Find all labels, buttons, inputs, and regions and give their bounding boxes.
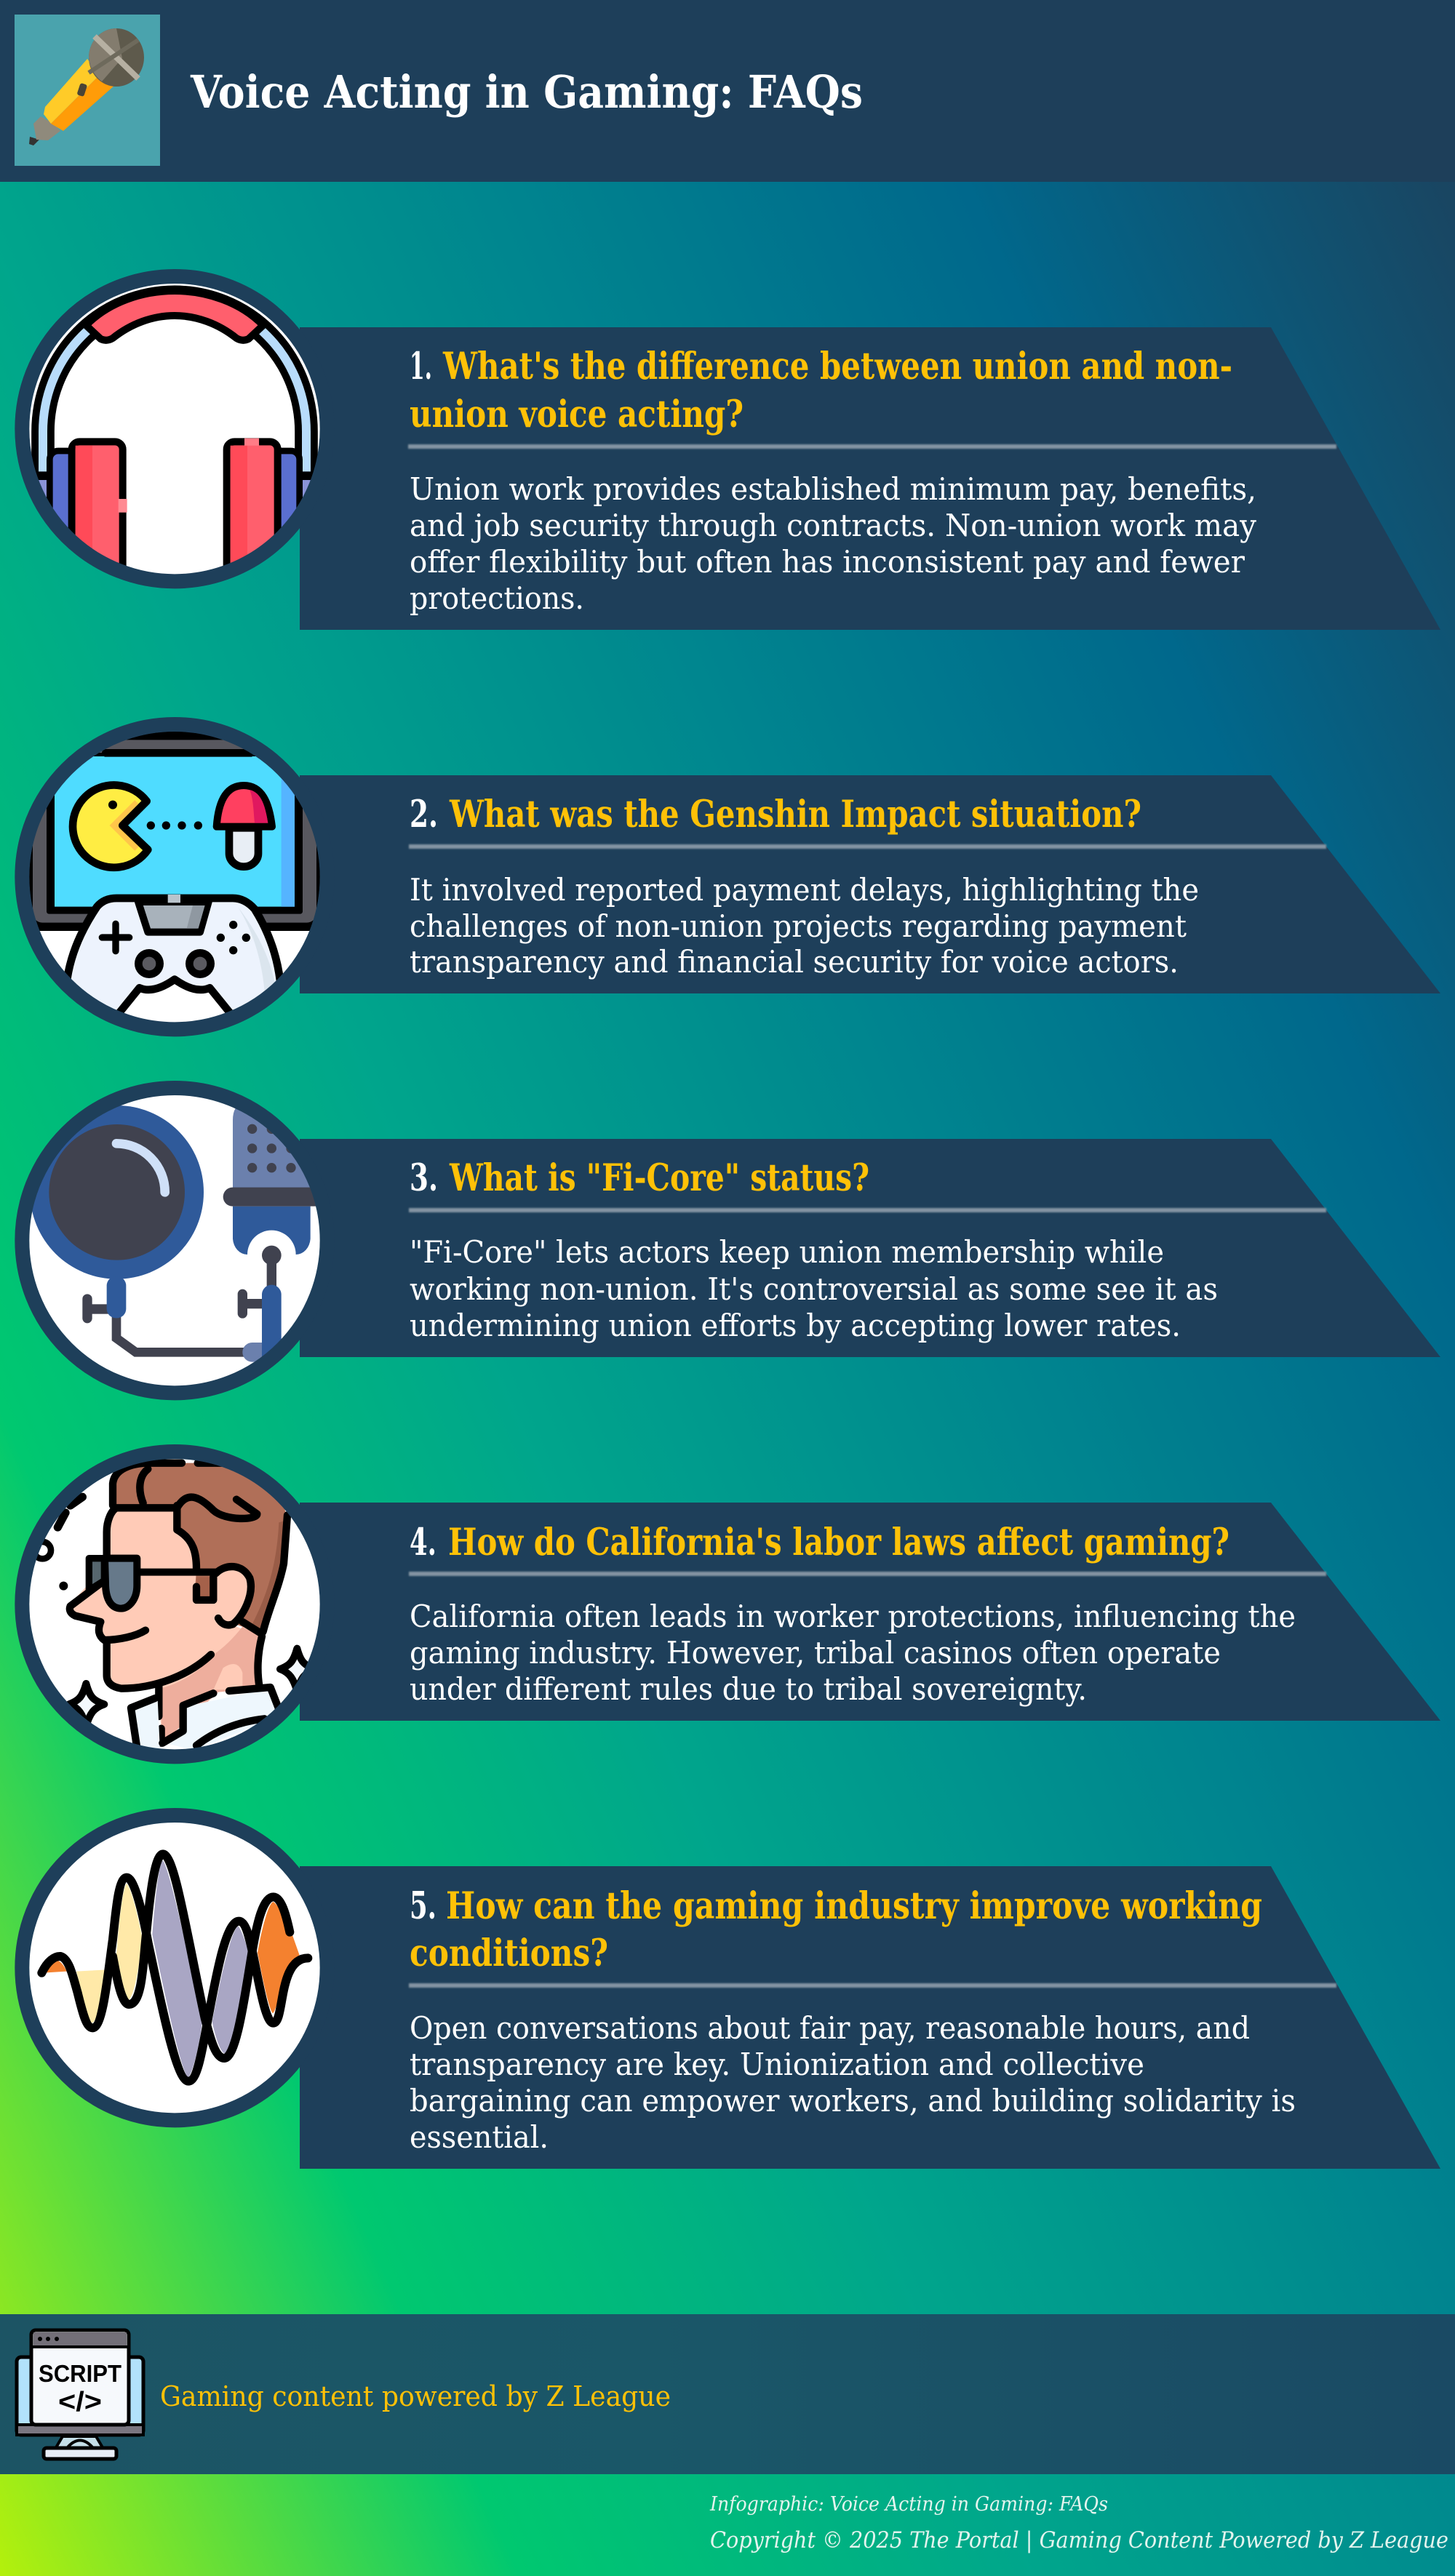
heading: 1. [410, 345, 432, 388]
heading [410, 1884, 1262, 1975]
ear [213, 1567, 251, 1625]
answer text: gaming industry. However, tribal casinos often operate [410, 1635, 1221, 1671]
footer tagline: Gaming content powered by Z League [160, 2380, 671, 2412]
heading: 3. [410, 1156, 438, 1200]
sparkles [69, 1684, 104, 1726]
title: Voice Acting in Gaming: FAQs [190, 65, 863, 119]
heading: 2. [410, 793, 438, 836]
answer text: challenges of non-union projects regarding payment [410, 908, 1187, 944]
heading: What was the Genshin Impact situation? [449, 793, 1141, 836]
answer text: Union work provides established minimum pay, benefits, [410, 471, 1256, 507]
answer text: protections. [410, 580, 584, 616]
answer text [410, 872, 1199, 980]
heading: How can the gaming industry improve working [446, 1884, 1262, 1928]
credits: Infographic: Voice Acting in Gaming: FAQs [709, 2493, 1108, 2516]
panel shape [300, 775, 1440, 993]
answer text: offer flexibility but often has inconsistent pay and fewer [410, 544, 1245, 580]
icon: sound wave [22, 1815, 327, 2120]
face and neck [69, 1508, 260, 1743]
heading: 4. [410, 1521, 436, 1564]
icon: script on monitor: SCRIPT [39, 2360, 121, 2387]
heading: conditions? [410, 1932, 608, 1975]
answer text: transparency and financial security for voice actors. [410, 944, 1179, 980]
panel shape [300, 327, 1440, 630]
heading: union voice acting? [410, 393, 744, 436]
answer text: essential. [410, 2119, 549, 2155]
answer text: undermining union efforts by accepting lower rates. [410, 1308, 1181, 1343]
answer text: and job security through contracts. Non-union work may [410, 508, 1256, 543]
answer text: under different rules due to tribal sovereignty. [410, 1671, 1087, 1707]
heading: 5. [410, 1884, 436, 1928]
answer text: It involved reported payment delays, highlighting the [410, 872, 1199, 908]
icon: game monitor and controller [22, 724, 327, 1038]
answer text: Open conversations about fair pay, reasonable hours, and [410, 2010, 1250, 2046]
credits [709, 2493, 1448, 2553]
collar [165, 1689, 279, 1751]
answer text: working non-union. It's controversial as some see it as [410, 1271, 1218, 1307]
answer text [410, 1599, 1296, 1707]
answer text [410, 2010, 1296, 2155]
icon: script on monitor [17, 2330, 143, 2459]
icon: studio microphone and pop filter [22, 1088, 327, 1393]
answer text [410, 471, 1256, 616]
heading [410, 345, 1232, 436]
mushroom [229, 828, 258, 867]
answer text: transparency are key. Unionization and collective [410, 2047, 1144, 2082]
panel shape [300, 1503, 1440, 1721]
pacman [73, 785, 148, 868]
icon: script on monitor: </> [58, 2387, 102, 2417]
panel shape [300, 1139, 1440, 1357]
footer band [0, 2314, 1455, 2474]
controller [64, 895, 283, 1009]
answer text [410, 1234, 1218, 1343]
panel 2 [300, 775, 1440, 993]
panel 1 [300, 327, 1440, 630]
heading: How do California's labor laws affect gaming? [448, 1521, 1229, 1564]
icon: headphones [22, 276, 327, 597]
hair [113, 1463, 287, 1634]
glasses [89, 1559, 104, 1591]
answer text: California often leads in worker protections, influencing the [410, 1599, 1296, 1634]
icon: microphone [15, 15, 160, 166]
icon: man with glasses [22, 1452, 327, 1756]
header bar [0, 0, 1455, 182]
answer text: bargaining can empower workers, and building solidarity is [410, 2083, 1296, 2119]
heading: What's the difference between union and non- [442, 345, 1232, 388]
panel 4 [300, 1503, 1440, 1721]
panel shape [300, 1866, 1440, 2169]
heading: What is "Fi-Core" status? [449, 1156, 869, 1200]
panel 5 [300, 1866, 1440, 2169]
answer text: "Fi-Core" lets actors keep union membership while [410, 1234, 1164, 1270]
panel 3 [300, 1139, 1440, 1357]
